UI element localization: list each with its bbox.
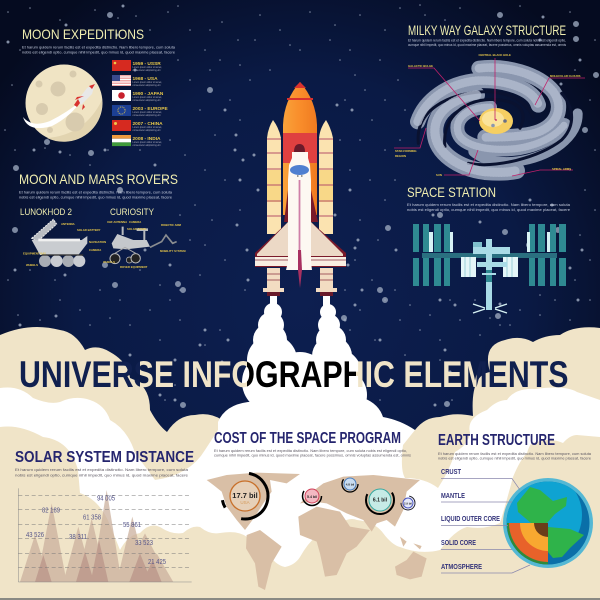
front clouds (cream) bbox=[0, 426, 600, 600]
callout: USA: USA bbox=[240, 500, 250, 505]
flag: USA bbox=[112, 75, 162, 87]
text block: Et harum quidem rerum facilis est et expedita distinctio. Nam libero tempore, cum soluta nobis est eligendi optio, bbox=[408, 38, 566, 42]
text block: nobis est eligendi optio, cumque nihil impedit, quo minus id, quod maxime placeat, facere bbox=[15, 474, 188, 478]
chart: distance triangles: 94 005 bbox=[97, 496, 115, 502]
text block: Et harum quidem rerum facilis est et expedita distinctio. Nam libero tempore, cum soluta bbox=[438, 452, 591, 456]
galaxy labels: SPIRAL ARMS bbox=[552, 167, 571, 171]
panel: space station bbox=[407, 184, 570, 313]
rover tags: Lunokhod: CAMERA bbox=[89, 248, 101, 252]
heading: SOLAR SYSTEM DISTANCE bbox=[15, 449, 194, 466]
heading: COST OF THE SPACE PROGRAM bbox=[214, 430, 401, 447]
title: UNIVERSE INFOGRAPHIC ELEMENTS bbox=[19, 354, 569, 395]
galaxy labels: CENTRAL BLACK HOLE bbox=[478, 53, 511, 57]
chart: distance triangles: 82 189 bbox=[42, 508, 60, 514]
label: atmosphere: ATMOSPHERE bbox=[441, 564, 482, 571]
external tank bbox=[283, 82, 317, 215]
chart: distance triangles: 38 311 bbox=[69, 534, 87, 541]
flag: USA: consectetur adipisicing elit bbox=[132, 84, 161, 87]
rover tags: Curiosity: MOBILITY SYSTEM bbox=[160, 249, 186, 253]
callout: Europe: 5.4 bil bbox=[307, 495, 317, 499]
galactic core bbox=[479, 108, 513, 134]
world map bbox=[207, 473, 427, 590]
heading: MOON EXPEDITIONS bbox=[22, 26, 144, 42]
label lines bbox=[441, 478, 530, 573]
callout: USA: 17.7 bil bbox=[232, 491, 258, 500]
panel: earth structure bbox=[438, 432, 593, 573]
rover tags: Curiosity: UHF ANTENNA bbox=[107, 220, 127, 224]
heading: EARTH STRUCTURE bbox=[438, 432, 555, 449]
flag: Europe: Lorem ipsum dolor sit amet, bbox=[132, 111, 162, 114]
flag: Europe: consectetur adipisicing elit bbox=[132, 114, 161, 117]
rover tags: Lunokhod: SOLAR BATTERY bbox=[77, 228, 101, 232]
text block: Et harum quidem rerum facilis est et expedita distinctio. Nam libero tempore, cum soluta bbox=[22, 46, 175, 50]
text block: nobis est eligendi optio, cumque nihil impedit, quo minus id, quod maxime placeat, facere bbox=[407, 208, 570, 212]
icon: earth cross-section bbox=[503, 478, 593, 568]
text block bbox=[214, 449, 411, 458]
flag: India: Lorem ipsum dolor sit amet, bbox=[132, 141, 162, 144]
rover tags: Lunokhod: EQUIPMENT BAY bbox=[23, 252, 46, 256]
chart: distance triangles: 61 358 bbox=[83, 514, 101, 522]
back clouds (cream) bbox=[0, 327, 600, 600]
bottom edge line bbox=[0, 598, 600, 600]
callout: China: 6.1 bil bbox=[373, 498, 388, 504]
heading: MOON AND MARS ROVERS bbox=[19, 171, 178, 187]
text block bbox=[19, 190, 172, 200]
icon: Curiosity rover bbox=[110, 227, 177, 264]
flag: India: 2008 - INDIA bbox=[132, 136, 161, 142]
label: mantle: MANTLE bbox=[441, 493, 465, 500]
callout: USA bbox=[218, 469, 272, 523]
flag: Japan bbox=[112, 90, 164, 102]
rover tags: Curiosity: ROBOTIC ARM bbox=[161, 223, 182, 227]
chart: distance triangles: 21 425 bbox=[148, 559, 166, 566]
engines bbox=[263, 268, 337, 292]
flag: Europe: 2003 - EUROPE bbox=[132, 106, 168, 112]
rover tags: Curiosity: SOLAR PANEL bbox=[127, 227, 147, 231]
booster left bbox=[267, 120, 281, 234]
rover tags: Curiosity: WHEELS bbox=[103, 260, 115, 264]
icon: space station bbox=[413, 224, 566, 313]
panel: moon expeditions bbox=[22, 26, 175, 147]
panel: moon and mars rovers bbox=[19, 171, 186, 269]
label: crust: CRUST bbox=[441, 469, 462, 476]
chart: galaxy spiral bbox=[418, 68, 578, 172]
callout: Japan bbox=[401, 496, 415, 510]
rover tags: Lunokhod: ANTENNA bbox=[61, 222, 75, 226]
icon: space shuttle bbox=[255, 82, 346, 296]
chart: distance triangles: 33 523 bbox=[135, 540, 153, 547]
flag: India: consectetur adipisicing elit bbox=[132, 144, 161, 147]
flag: USSR bbox=[112, 60, 162, 72]
callout: Japan: 2.9 bil bbox=[404, 502, 412, 506]
subheading: Curiosity: CURIOSITY bbox=[110, 207, 155, 218]
flag: China: consectetur adipisicing elit bbox=[132, 129, 161, 132]
text block bbox=[407, 203, 570, 212]
text block: Et harum quidem rerum facilis est et expedita distinctio. Nam libero tempore, cum soluta bbox=[407, 203, 570, 207]
chart: distance triangles: 43 526 bbox=[26, 532, 44, 539]
text block bbox=[438, 452, 591, 460]
flag: USSR: consectetur adipisicing elit bbox=[132, 69, 161, 72]
orbiter wings bbox=[255, 190, 346, 267]
galaxy labels: GALACTIC BULGE bbox=[408, 64, 433, 68]
chart: distance triangles: 55 861 bbox=[123, 522, 141, 529]
panel: solar system distance bbox=[15, 449, 194, 582]
panel: cost of the space program bbox=[214, 430, 415, 523]
label: liquid outer core: LIQUID OUTER CORE bbox=[441, 516, 500, 523]
galaxy callouts bbox=[394, 58, 585, 176]
flag: Europe bbox=[112, 105, 168, 117]
callout: China bbox=[366, 486, 394, 514]
flag: Japan: Lorem ipsum dolor sit amet, bbox=[132, 96, 162, 99]
galaxy labels bbox=[395, 53, 581, 177]
middle clouds (white) and rocket smoke bbox=[0, 295, 600, 600]
text block: nobis est eligendi optio, cumque nihil impedit, quo minus id, quod maxime placeat, facere bbox=[438, 456, 591, 460]
flag: China: Lorem ipsum dolor sit amet, bbox=[132, 126, 162, 129]
rover tags: Lunokhod bbox=[23, 222, 106, 267]
smoke plumes bbox=[242, 295, 367, 422]
orbiter fuselage bbox=[286, 152, 312, 270]
text block: nobis est eligendi optio, cumque nihil impedit, quo minus id, quod maxime placeat, facere bbox=[19, 196, 172, 200]
galaxy labels: MOLECULAR CLOUDS bbox=[550, 74, 581, 78]
galaxy labels: REGION bbox=[395, 154, 406, 158]
text block: cumque nihil impedit, quo minus id, quod maxime placeat, facere possimus, omnis voluptas assumenda est, omnis bbox=[214, 454, 411, 458]
text block: Et harum quidem rerum facilis est et expedita distinctio. Nam libero tempore, cum soluta nobis est eligendi optio, bbox=[214, 449, 407, 453]
subheading: Lunokhod 2: LUNOKHOD 2 bbox=[20, 207, 72, 218]
text block bbox=[408, 38, 566, 47]
icon: moon with rocket bbox=[23, 64, 102, 142]
text block bbox=[15, 468, 188, 478]
galaxy labels: SUN bbox=[436, 173, 442, 177]
flag: China bbox=[112, 120, 163, 132]
flag: USA: Lorem ipsum dolor sit amet, bbox=[132, 81, 162, 84]
star field bbox=[5, 5, 596, 405]
booster right bbox=[319, 120, 333, 234]
flag: USSR: 1959 - USSR bbox=[132, 61, 161, 67]
callout: Russia bbox=[342, 476, 358, 492]
heading: SPACE STATION bbox=[407, 184, 496, 200]
flag: USA: 1968 - USA bbox=[132, 76, 158, 82]
icon: Lunokhod rover bbox=[32, 219, 87, 267]
callout: Russia: 4.8 bil bbox=[346, 482, 354, 486]
callout: Europe bbox=[302, 486, 322, 506]
text block: Et harum quidem rerum facilis est et expedita distinctio. Nam libero tempore, cum soluta bbox=[15, 468, 188, 472]
rover tags: Lunokhod: WHEELS bbox=[26, 263, 38, 267]
chart: distance triangles bbox=[18, 488, 192, 582]
text block: nobis est eligendi optio, cumque nihil impedit, quo minus id, quod maxime placeat, facere bbox=[22, 50, 175, 54]
rover tags: Curiosity bbox=[103, 220, 186, 269]
text block: cumque nihil impedit, quo minus id, quod maxime placeat, facere possimus, omnis voluptas assumenda est, omnis bbox=[408, 43, 566, 47]
flag: Japan: consectetur adipisicing elit bbox=[132, 99, 161, 102]
flag: India bbox=[112, 135, 162, 147]
rover tags: Curiosity: CAMERA bbox=[129, 220, 141, 224]
rover tags: Curiosity: ROVER EQUIPMENT bbox=[120, 265, 148, 269]
text block bbox=[22, 46, 175, 54]
label: solid core: SOLID CORE bbox=[441, 540, 476, 547]
flag: China: 2007 - CHINA bbox=[132, 121, 163, 127]
panel: milky way galaxy bbox=[394, 22, 585, 177]
text block: Et harum quidem rerum facilis est et expedita distinctio. Nam libero tempore, cum soluta bbox=[19, 190, 172, 194]
flag: Japan: 1990 - JAPAN bbox=[132, 91, 164, 97]
rover tags: Lunokhod: NAVIGATION bbox=[89, 240, 106, 244]
flag: USSR: Lorem ipsum dolor sit amet, bbox=[132, 66, 162, 69]
galaxy labels: STAR-FORMING bbox=[395, 149, 417, 153]
